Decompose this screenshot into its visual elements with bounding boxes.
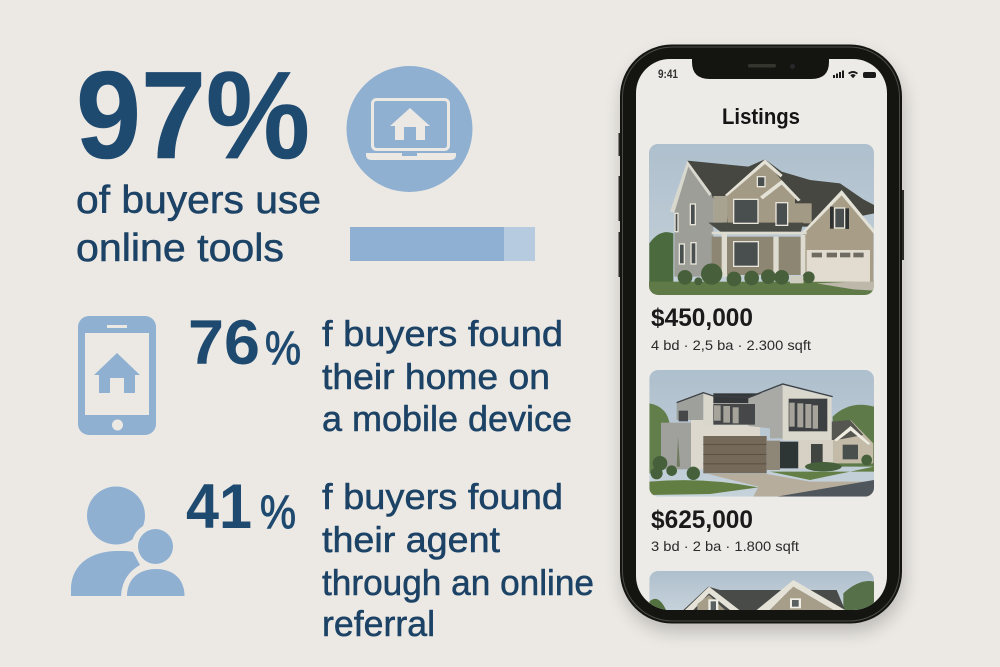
listing photo 3 bbox=[649, 571, 874, 610]
text: found home on mobile device bbox=[322, 313, 572, 439]
text: found home on mobile device: their home on bbox=[322, 356, 550, 397]
listing photo 1 bbox=[649, 144, 874, 295]
text: found agent through online referral: through an online bbox=[322, 562, 594, 603]
phone screen bbox=[636, 59, 887, 610]
price: $450,000: $450,000 bbox=[651, 304, 753, 332]
price: $625,000: $625,000 bbox=[651, 506, 753, 534]
status bar icons bbox=[833, 70, 876, 78]
text: found home on mobile device: f buyers found bbox=[322, 313, 563, 354]
icon: people bbox=[71, 486, 184, 596]
text: found agent through online referral: referral bbox=[322, 603, 435, 644]
listing photo 2 bbox=[649, 370, 874, 497]
text: of buyers use online tools: online tools bbox=[76, 227, 284, 270]
statistic: 41%: % bbox=[260, 485, 296, 538]
text: found agent through online referral: f buyers found bbox=[322, 476, 563, 517]
icon: smartphone with house bbox=[78, 316, 156, 435]
details: listing 1: 4 bd · 2,5 ba · 2.300 sqft bbox=[651, 337, 811, 353]
status bar: time: 9:41 bbox=[658, 67, 678, 81]
text: of buyers use online tools bbox=[76, 179, 321, 270]
statistic: 76%: 76 bbox=[188, 308, 260, 378]
text: found agent through online referral bbox=[322, 476, 594, 644]
text: found home on mobile device: a mobile device bbox=[322, 398, 572, 439]
heading: Listings: Listings bbox=[722, 104, 800, 129]
statistic: 41% bbox=[186, 472, 296, 542]
phone mockup bbox=[618, 44, 904, 632]
icon: laptop with house in circle bbox=[346, 66, 472, 192]
headline statistic: 97%: 97% bbox=[76, 47, 310, 185]
statistic: 41%: 41 bbox=[186, 472, 252, 542]
details: listing 2: 3 bd · 2 ba · 1.800 sqft bbox=[651, 538, 799, 554]
progress bar: 97 percent bbox=[350, 227, 535, 261]
text: of buyers use online tools: of buyers use bbox=[76, 179, 321, 222]
notch bbox=[692, 56, 829, 79]
statistic: 76%: % bbox=[265, 321, 301, 374]
statistic: 76% bbox=[188, 308, 301, 378]
text: found agent through online referral: their agent bbox=[322, 519, 500, 560]
